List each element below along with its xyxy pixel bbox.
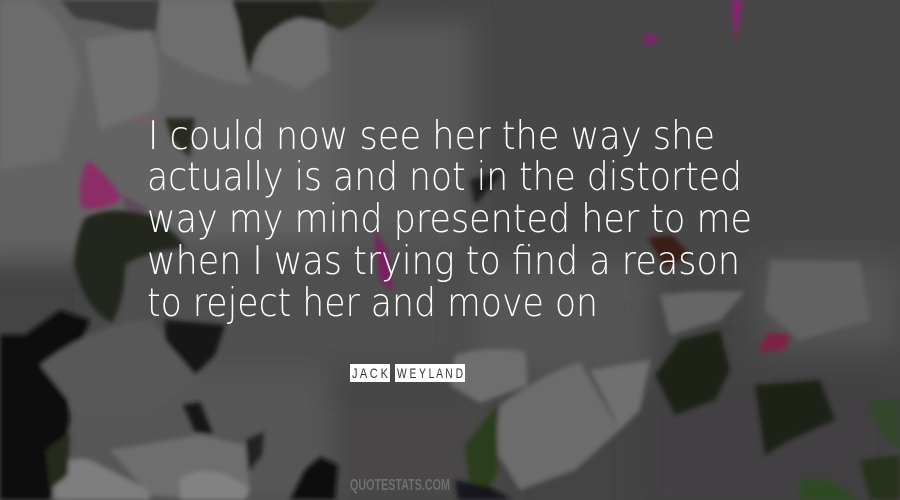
quote line 2: actually is and not in the distorted [147, 155, 742, 200]
pink spots [758, 332, 790, 352]
pink centre left [80, 160, 122, 209]
author last name: W E Y L A N D [397, 365, 463, 381]
quote line 3: way my mind presented her to me [147, 197, 752, 242]
petal left [0, 0, 80, 170]
white petals centre bottom [450, 349, 528, 403]
quote line 5: to reject her and move on [147, 281, 598, 326]
quote text [147, 114, 752, 326]
quote line 4: when I was trying to find a reason [147, 239, 740, 284]
dark leaves right [655, 330, 730, 415]
watermark: QUOTESTATS.COM [350, 477, 450, 494]
petal top middle [255, 18, 330, 90]
lower left darkness [0, 310, 90, 500]
dark gaps top [60, 0, 160, 32]
quote line 1: I could now see her the way she [148, 114, 715, 159]
dark patch near first words [165, 118, 195, 158]
author first name: J A C K [352, 365, 389, 381]
leaf left [74, 211, 185, 323]
petal top centre [160, 0, 250, 85]
green leaf bottom centre [465, 405, 498, 490]
author label [350, 364, 465, 382]
